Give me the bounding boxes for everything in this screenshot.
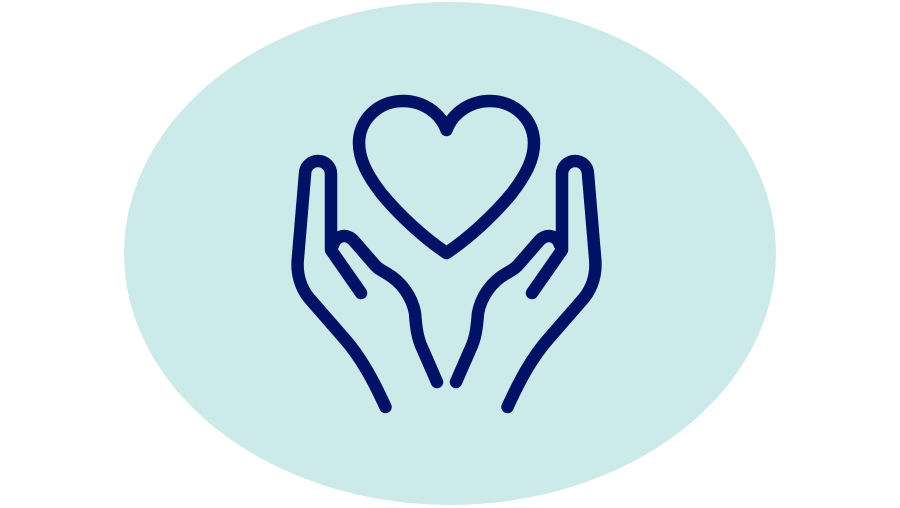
icon: left hand [298, 161, 437, 407]
right hand outline [508, 161, 595, 407]
left hand outline [298, 161, 386, 407]
icon: heart [359, 101, 534, 253]
background ellipse [124, 2, 776, 505]
icon: right hand [456, 161, 595, 407]
right hand thumb and palm [456, 236, 560, 382]
left hand thumb and palm [333, 236, 437, 382]
